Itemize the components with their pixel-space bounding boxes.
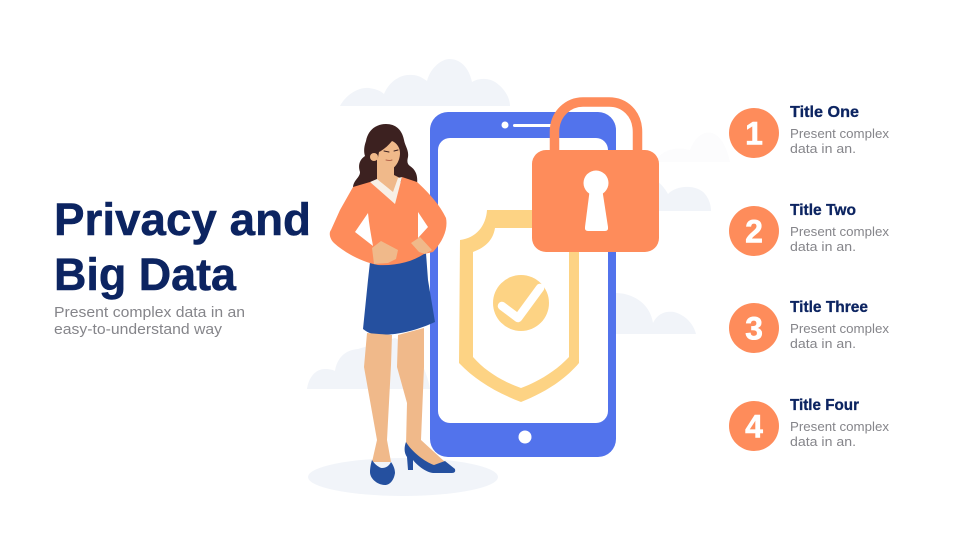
number badge 2: 2	[745, 214, 763, 250]
description one	[790, 126, 890, 156]
padlock	[532, 102, 659, 252]
hair	[353, 124, 417, 188]
heading: main title	[54, 194, 311, 300]
woman figure	[330, 124, 455, 485]
sweater	[330, 177, 446, 265]
description two: Present complex	[790, 224, 890, 239]
text block: subtitle	[54, 304, 245, 338]
description four: data in an.	[790, 434, 856, 449]
number badge 3	[729, 303, 779, 353]
shoes	[370, 460, 395, 485]
background clouds	[307, 59, 730, 389]
list item 2	[729, 202, 890, 256]
number badge 2	[729, 206, 779, 256]
neck and face	[370, 141, 400, 198]
smartphone	[430, 112, 616, 457]
title four: Title Four	[790, 397, 859, 414]
ground shadow	[308, 458, 498, 496]
title two: Title Two	[790, 202, 856, 219]
list item 3	[729, 299, 890, 353]
number badge 4: 4	[745, 408, 763, 444]
description two: data in an.	[790, 239, 856, 254]
hands	[372, 237, 432, 264]
description four: Present complex	[790, 419, 890, 434]
description one: data in an.	[790, 141, 856, 156]
text block: subtitle: Present complex data in an	[54, 304, 245, 321]
number badge 1	[729, 108, 779, 158]
description three: Present complex	[790, 321, 890, 336]
list item 4	[729, 397, 890, 451]
description three: data in an.	[790, 336, 856, 351]
collar	[370, 177, 402, 204]
description four	[790, 419, 890, 449]
text block: subtitle: easy-to-understand way	[54, 321, 223, 338]
number badge 4	[729, 401, 779, 451]
description one: Present complex	[790, 126, 890, 141]
description three	[790, 321, 890, 351]
skirt	[363, 253, 435, 335]
title three: Title Three	[790, 299, 868, 316]
heading: main title: Big Data	[54, 249, 237, 300]
description two	[790, 224, 890, 254]
legs	[364, 333, 392, 462]
shield with check mark	[459, 210, 579, 402]
heading: main title: Privacy and	[54, 194, 311, 245]
title one: Title One	[790, 104, 859, 121]
number badge 1: 1	[745, 116, 763, 152]
facial features	[384, 150, 398, 160]
number badge 3: 3	[745, 310, 763, 346]
list item 1	[729, 104, 890, 158]
